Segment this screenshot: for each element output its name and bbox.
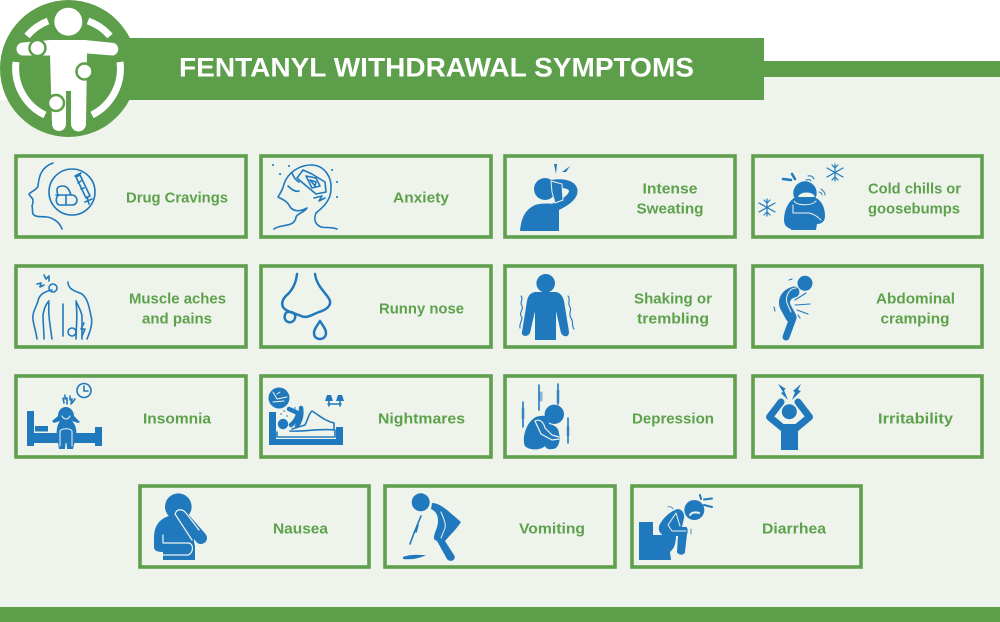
panel: Nausea: [140, 486, 369, 567]
panel: Muscle aches and pains: [16, 266, 246, 347]
panel: Intense Sweating: Intense: [642, 180, 698, 197]
icon: person awake on bed: [27, 384, 102, 449]
panel: Vomiting: [385, 486, 615, 567]
icon: angry person: [770, 384, 810, 450]
panel: Intense Sweating: Sweating: [636, 200, 704, 217]
panel: Depression: Depression: [632, 410, 714, 427]
panel: Anxiety: Anxiety: [393, 189, 450, 206]
panel: Runny nose: Runny nose: [379, 300, 464, 317]
icon: head with tangled thoughts: [273, 165, 337, 229]
icon: person covering mouth: [154, 493, 201, 560]
panel: Abdominal cramping: Abdominal: [876, 290, 955, 307]
panel: Insomnia: [16, 376, 246, 457]
icon: person with cramp: [774, 276, 812, 337]
panel: Drug Cravings: [16, 156, 246, 237]
panel: Irritability: [753, 376, 982, 457]
panel: Nightmares: Nightmares: [378, 410, 465, 427]
panel: Cold chills or goosebumps: Cold chills or: [868, 180, 961, 197]
icon: shaking person: [520, 274, 574, 340]
panel: Shaking or trembling: Shaking or: [634, 290, 712, 307]
header stripe: [764, 61, 1000, 77]
panel: Irritability: Irritability: [878, 410, 954, 427]
panel: Nightmares: [261, 376, 491, 457]
icon: back with pain points: [33, 275, 92, 339]
icon: body with pain points: [0, 0, 137, 137]
panel: Cold chills or goosebumps: goosebumps: [868, 200, 960, 217]
panel: Insomnia: Insomnia: [143, 410, 212, 427]
icon: shivering person with snowflakes: [759, 164, 843, 230]
panel: Vomiting: Vomiting: [519, 520, 585, 537]
panel: Anxiety: [261, 156, 491, 237]
icon: person vomiting: [403, 493, 461, 561]
panel: Intense Sweating: [505, 156, 735, 237]
panel: Runny nose: [261, 266, 491, 347]
icon: person wiping sweat: [520, 164, 573, 231]
icon: head with pills: [29, 163, 95, 229]
panel: Shaking or trembling: trembling: [637, 310, 709, 327]
panel: Abdominal cramping: cramping: [880, 310, 950, 327]
title banner: [125, 38, 764, 100]
panel: Depression: [505, 376, 735, 457]
panel: Muscle aches and pains: Muscle aches: [129, 290, 226, 307]
icon: person dreaming in bed: [268, 388, 344, 445]
icon: person on toilet: [639, 495, 712, 560]
title banner: FENTANYL WITHDRAWAL SYMPTOMS: [179, 52, 694, 82]
panel: Diarrhea: [632, 486, 861, 567]
panel: Muscle aches and pains: and pains: [142, 310, 212, 327]
panel: Diarrhea: Diarrhea: [762, 520, 827, 537]
panel: Abdominal cramping: [753, 266, 982, 347]
panel: Cold chills or goosebumps: [753, 156, 982, 237]
bottom band: [0, 607, 1000, 622]
icon: nose with drip: [282, 274, 330, 339]
panel: Nausea: Nausea: [273, 520, 329, 537]
panel: Shaking or trembling: [505, 266, 735, 347]
panel: Drug Cravings: Drug Cravings: [126, 189, 228, 206]
icon: person curled up: [523, 384, 568, 449]
